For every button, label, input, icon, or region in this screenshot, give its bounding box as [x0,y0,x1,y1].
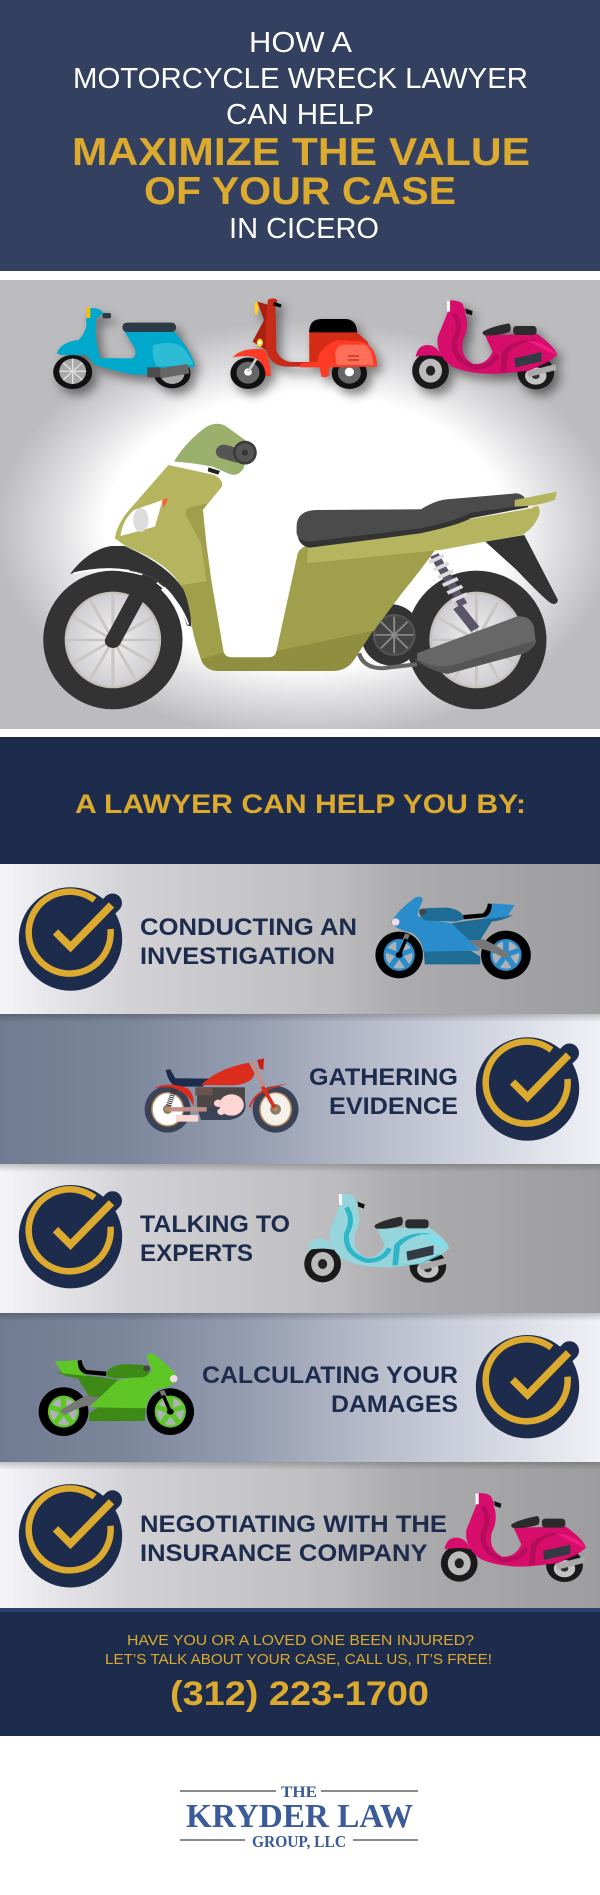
panel: scooter hero [0,280,600,729]
title: intro lines [73,27,528,131]
front wheel [43,571,183,709]
icon: pink scooter [412,300,557,389]
title: location: IN CICERO [229,213,379,245]
logo: The Kryder Law Group, LLC: KRYDER LAW [186,1798,413,1835]
text [309,1064,458,1120]
text: TALKING TO [140,1211,290,1238]
text: INSURANCE COMPANY [140,1540,428,1567]
icon: blue scooter [53,307,195,389]
call to action text: LET’S TALK ABOUT YOUR CASE, CALL US, IT’S FREE! [105,1651,492,1668]
tail cowl [307,506,540,563]
panel: call to action footer [0,1608,600,1736]
headlight [121,498,168,536]
text: NEGOTIATING WITH THE [140,1511,447,1538]
text: DAMAGES [331,1391,458,1418]
title: intro lines: MOTORCYCLE WRECK LAWYER [73,63,528,95]
text [140,914,357,970]
rear wheel [406,571,546,709]
title: intro lines: CAN HELP [226,99,374,131]
heading: A LAWYER CAN HELP YOU BY: [75,789,526,819]
tail fin [515,492,557,507]
call to action text: HAVE YOU OR A LOVED ONE BEEN INJURED? [127,1632,474,1649]
phone number: (312) 223-1700 [170,1675,429,1713]
text [140,1211,290,1267]
text: EVIDENCE [329,1093,458,1120]
rear fender [485,535,558,604]
icon: blue sport motorcycle [375,897,531,979]
text [202,1362,458,1418]
title: highlighted headline [72,131,530,213]
icon: checkmark [19,1484,122,1588]
logo: The Kryder Law Group, LLC [180,1784,418,1851]
text: GATHERING [309,1064,458,1091]
hand grip [224,441,257,465]
panel: step 4 calculating your damages [0,1313,600,1462]
small disc wheel [361,604,421,666]
rear shock [434,555,475,629]
handlebar neck [207,467,220,475]
call to action text [105,1632,492,1668]
body lower and floorboard [180,543,440,671]
text [140,1511,447,1567]
icon: red scooter [230,298,377,389]
logo: The Kryder Law Group, LLC: GROUP, LLC [252,1832,346,1851]
icon: teal scooter [304,1194,449,1283]
panel: step 2 gathering evidence [0,1014,600,1164]
icon: pink scooter [441,1493,586,1582]
icon: checkmark [476,1037,579,1141]
icon: red cruiser motorcycle [145,1058,299,1133]
icon: checkmark [19,1185,122,1288]
front fork [113,595,138,641]
panel: step 1 conducting an investigation [0,864,600,1014]
title: highlighted headline: MAXIMIZE THE VALUE [72,131,530,174]
panel: header [0,0,600,271]
heading band [0,737,600,864]
icon: checkmark [19,887,122,991]
front fender [70,546,191,627]
illustration: large olive scooter [43,424,558,709]
panel: step 5 negotiating with the insurance company [0,1462,600,1608]
front shield [115,463,222,585]
seat [297,493,528,548]
head cowl [175,424,245,475]
exhaust muffler [415,616,536,674]
panel: step 3 talking to experts [0,1164,600,1313]
title: intro lines: HOW A [249,27,353,59]
text: INVESTIGATION [140,943,335,970]
text: CALCULATING YOUR [202,1362,458,1389]
icon: green sport motorcycle [39,1353,194,1436]
icon: checkmark [476,1335,579,1438]
logo: The Kryder Law Group, LLC: THE [281,1784,317,1801]
text: CONDUCTING AN [140,914,357,941]
title: highlighted headline: OF YOUR CASE [144,170,456,213]
text: EXPERTS [140,1240,253,1267]
